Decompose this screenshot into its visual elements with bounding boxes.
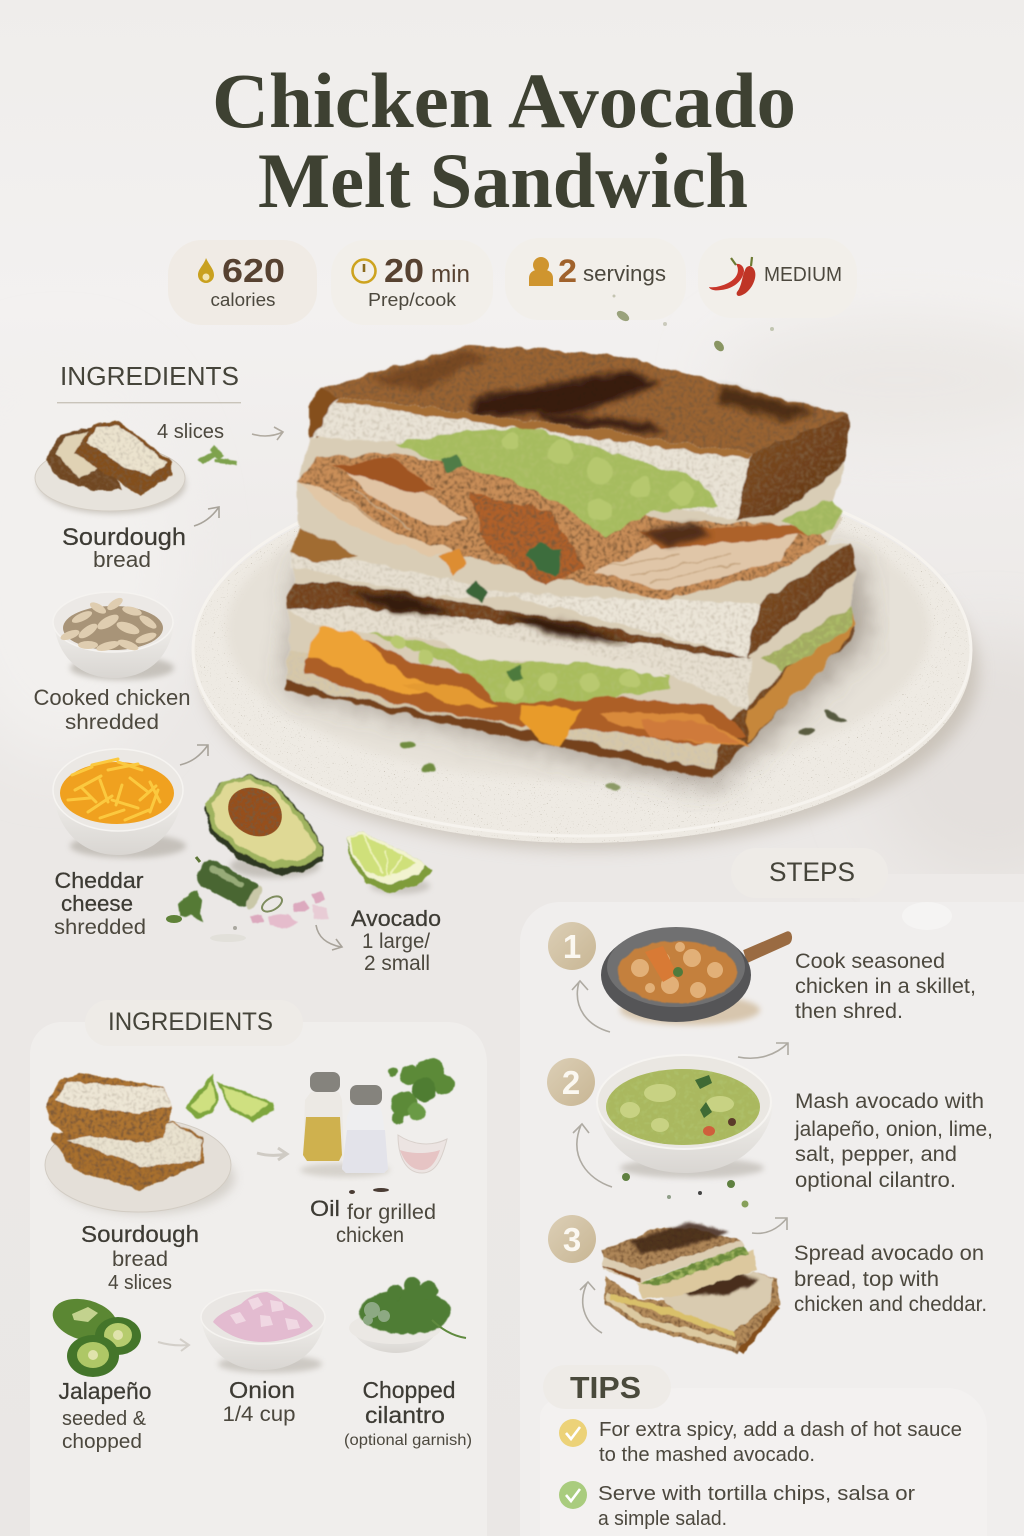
heading tab: tips — [543, 1365, 671, 1409]
arrow up — [572, 981, 610, 1032]
label: cooked chicken — [34, 685, 190, 734]
icon: sourdough on plate — [35, 422, 186, 514]
decorative splash — [902, 902, 952, 930]
label: onion: Onion — [229, 1377, 295, 1403]
lower sandwich: avocado — [365, 632, 671, 702]
label: avocado: Avocado — [351, 906, 441, 931]
step 2 — [547, 1055, 993, 1233]
stat: spice level — [698, 238, 857, 318]
top slice avocado — [395, 427, 842, 537]
label: cheddar cheese — [54, 868, 146, 939]
tip 2: a simple salad. — [598, 1508, 727, 1530]
text: step 1 — [795, 950, 976, 1023]
label: sourdough bread: Sourdough — [62, 524, 186, 551]
badge 2 — [547, 1058, 595, 1106]
label: sourdough: 4 slices — [108, 1272, 172, 1294]
crumbs — [622, 1173, 748, 1208]
text: step 2: jalapeño, onion, lime, — [794, 1118, 993, 1141]
label: cilantro — [344, 1377, 472, 1449]
tip 1: For extra spicy, add a dash of hot sauce — [599, 1419, 962, 1441]
top slice — [309, 345, 847, 522]
icon: jalapeno slices — [48, 1292, 141, 1377]
arrow: sourdough — [194, 507, 219, 526]
icon: check green — [559, 1481, 587, 1509]
arrow: avocado — [316, 925, 342, 950]
lower sandwich: right side filling — [747, 606, 855, 742]
stat: time: Prep/cook — [368, 290, 457, 310]
green filling — [640, 1246, 748, 1286]
stat: servings — [505, 238, 686, 320]
icon: bowl of chicken — [53, 592, 174, 680]
text: step 3: chicken and cheddar. — [794, 1293, 987, 1316]
icon: chili peppers — [709, 257, 755, 296]
herb sprig — [198, 446, 238, 465]
text: step 3: bread, top with — [794, 1268, 939, 1291]
icon: sliced sourdough — [45, 1073, 235, 1214]
label: sourdough: Sourdough — [81, 1221, 199, 1247]
lower sandwich: bottom slice — [286, 606, 855, 779]
label: onion — [222, 1377, 296, 1426]
title — [212, 57, 796, 224]
arrow: slices to sandwich — [252, 427, 283, 440]
label: cilantro: Chopped — [362, 1377, 456, 1403]
sandwich shadow — [286, 560, 870, 790]
icon: cilantro sprig — [387, 1058, 454, 1124]
label: oil: Oil — [310, 1196, 340, 1221]
icon: clock — [352, 260, 376, 282]
icon: person — [529, 257, 553, 286]
stat: time: min — [431, 261, 470, 288]
arrow right — [752, 1218, 787, 1233]
panel: tips — [540, 1365, 987, 1536]
chicken layer — [299, 453, 827, 604]
text: step 2: Mash avocado with — [795, 1090, 984, 1113]
badge 2: 2 — [562, 1064, 580, 1101]
label: cheddar cheese: Cheddar — [54, 868, 144, 893]
label: oil: for grilled — [347, 1201, 436, 1224]
tip 2: Serve with tortilla chips, salsa or — [598, 1483, 915, 1505]
sandwich — [286, 345, 870, 790]
arrow up — [580, 1282, 602, 1333]
label: sourdough bread — [62, 524, 186, 572]
icon: small oil dish — [398, 1135, 447, 1173]
label: 4 slices: 4 slices — [157, 421, 224, 443]
badge 3: 3 — [563, 1221, 581, 1258]
label: jalapeno: Jalapeño — [58, 1378, 152, 1404]
arrow up — [573, 1124, 612, 1187]
arrow right — [738, 1043, 788, 1058]
heading tab: steps — [731, 848, 888, 898]
tip 2 — [559, 1481, 915, 1530]
bottom slice — [605, 1272, 780, 1353]
stat: servings: 2 — [558, 253, 577, 289]
icon: skillet with chicken — [601, 927, 791, 1025]
text: step 1: chicken in a skillet, — [795, 975, 976, 998]
step 1 — [548, 922, 976, 1058]
text: step 2: salt, pepper, and — [795, 1143, 957, 1166]
label: avocado: 2 small — [364, 952, 430, 975]
stat: time — [331, 240, 493, 325]
icon: bowl of cheddar — [53, 749, 186, 858]
lower bread under top slice — [637, 1250, 757, 1299]
icon: bowl of onion — [201, 1290, 325, 1373]
label: jalapeno: seeded & — [62, 1408, 147, 1430]
icon: salt and pepper shakers — [300, 1072, 390, 1177]
silhouette base — [286, 345, 855, 779]
scattered herb flakes — [612, 294, 774, 353]
label: sourdough bread: bread — [93, 547, 151, 572]
label: cooked chicken: Cooked chicken — [34, 685, 190, 710]
stat: calories: 620 — [222, 252, 285, 289]
icon: mini sandwich — [603, 1222, 780, 1354]
icon: dish of chopped cilantro — [349, 1277, 466, 1353]
icon: avocado half — [205, 775, 323, 878]
text: step 1: then shred. — [795, 1000, 903, 1023]
label: avocado: 1 large/ — [362, 930, 430, 953]
label: sourdough — [81, 1221, 199, 1294]
stat: calories — [168, 240, 317, 325]
text: step 2 — [794, 1090, 993, 1192]
top slice — [603, 1228, 743, 1282]
heading tab: tips: TIPS — [570, 1370, 641, 1405]
stat: time: 20 — [384, 252, 424, 289]
title: Melt Sandwich — [258, 137, 748, 224]
label: oil — [310, 1196, 436, 1247]
label: jalapeno: chopped — [62, 1431, 142, 1453]
text: step 3: Spread avocado on — [794, 1242, 984, 1265]
label: avocado — [351, 906, 441, 975]
icon: check yellow — [559, 1419, 587, 1447]
label: cheddar cheese: shredded — [54, 916, 146, 939]
lower sandwich: top slice — [287, 583, 751, 710]
tip 1: to the mashed avocado. — [599, 1444, 815, 1466]
panel: steps — [520, 848, 1024, 1536]
badge 1 — [548, 922, 596, 970]
label: jalapeno — [58, 1378, 152, 1453]
label: oil: chicken — [336, 1224, 404, 1247]
label: cooked chicken: shredded — [65, 711, 159, 734]
label: cilantro: (optional garnish) — [344, 1432, 472, 1449]
badge 1: 1 — [563, 928, 581, 965]
text: step 1: Cook seasoned — [795, 950, 945, 973]
arrow: jalapeno to onion — [158, 1339, 189, 1351]
heading tab: steps: STEPS — [769, 857, 855, 887]
stat: spice level: MEDIUM — [764, 264, 842, 286]
label: cilantro: cilantro — [365, 1402, 445, 1428]
icon: lime wedges — [185, 1073, 275, 1122]
arrow: bread to seasonings — [257, 1148, 287, 1160]
middle bread — [291, 527, 855, 657]
icon: lime wedge — [347, 832, 432, 894]
icon: jalapeno, herbs and onion scatter — [166, 857, 329, 942]
badge 3 — [548, 1215, 596, 1263]
arrow: cheddar to plate — [180, 745, 208, 765]
icon: bowl of guacamole — [597, 1055, 773, 1178]
icon: flame drop — [198, 258, 214, 283]
tip 1 — [559, 1419, 962, 1466]
herb crumbs on plate — [400, 709, 847, 790]
title: Chicken Avocado — [212, 57, 796, 144]
heading tab: ingredients — [85, 1000, 303, 1046]
lower sandwich: filling — [303, 623, 750, 747]
stat: servings: servings — [583, 261, 666, 286]
heading: ingredients: INGREDIENTS — [60, 361, 239, 391]
text: step 3 — [794, 1242, 987, 1316]
specks — [349, 1188, 389, 1194]
label: onion: 1/4 cup — [222, 1403, 296, 1426]
panel: ingredients — [30, 1000, 487, 1536]
plate — [192, 464, 978, 850]
text: step 2: optional cilantro. — [795, 1169, 956, 1192]
stat: calories: calories — [210, 290, 276, 310]
heading tab: ingredients: INGREDIENTS — [108, 1008, 273, 1036]
label: cheddar cheese: cheese — [61, 891, 133, 916]
label: sourdough: bread — [112, 1248, 168, 1271]
step 3 — [548, 1215, 987, 1354]
